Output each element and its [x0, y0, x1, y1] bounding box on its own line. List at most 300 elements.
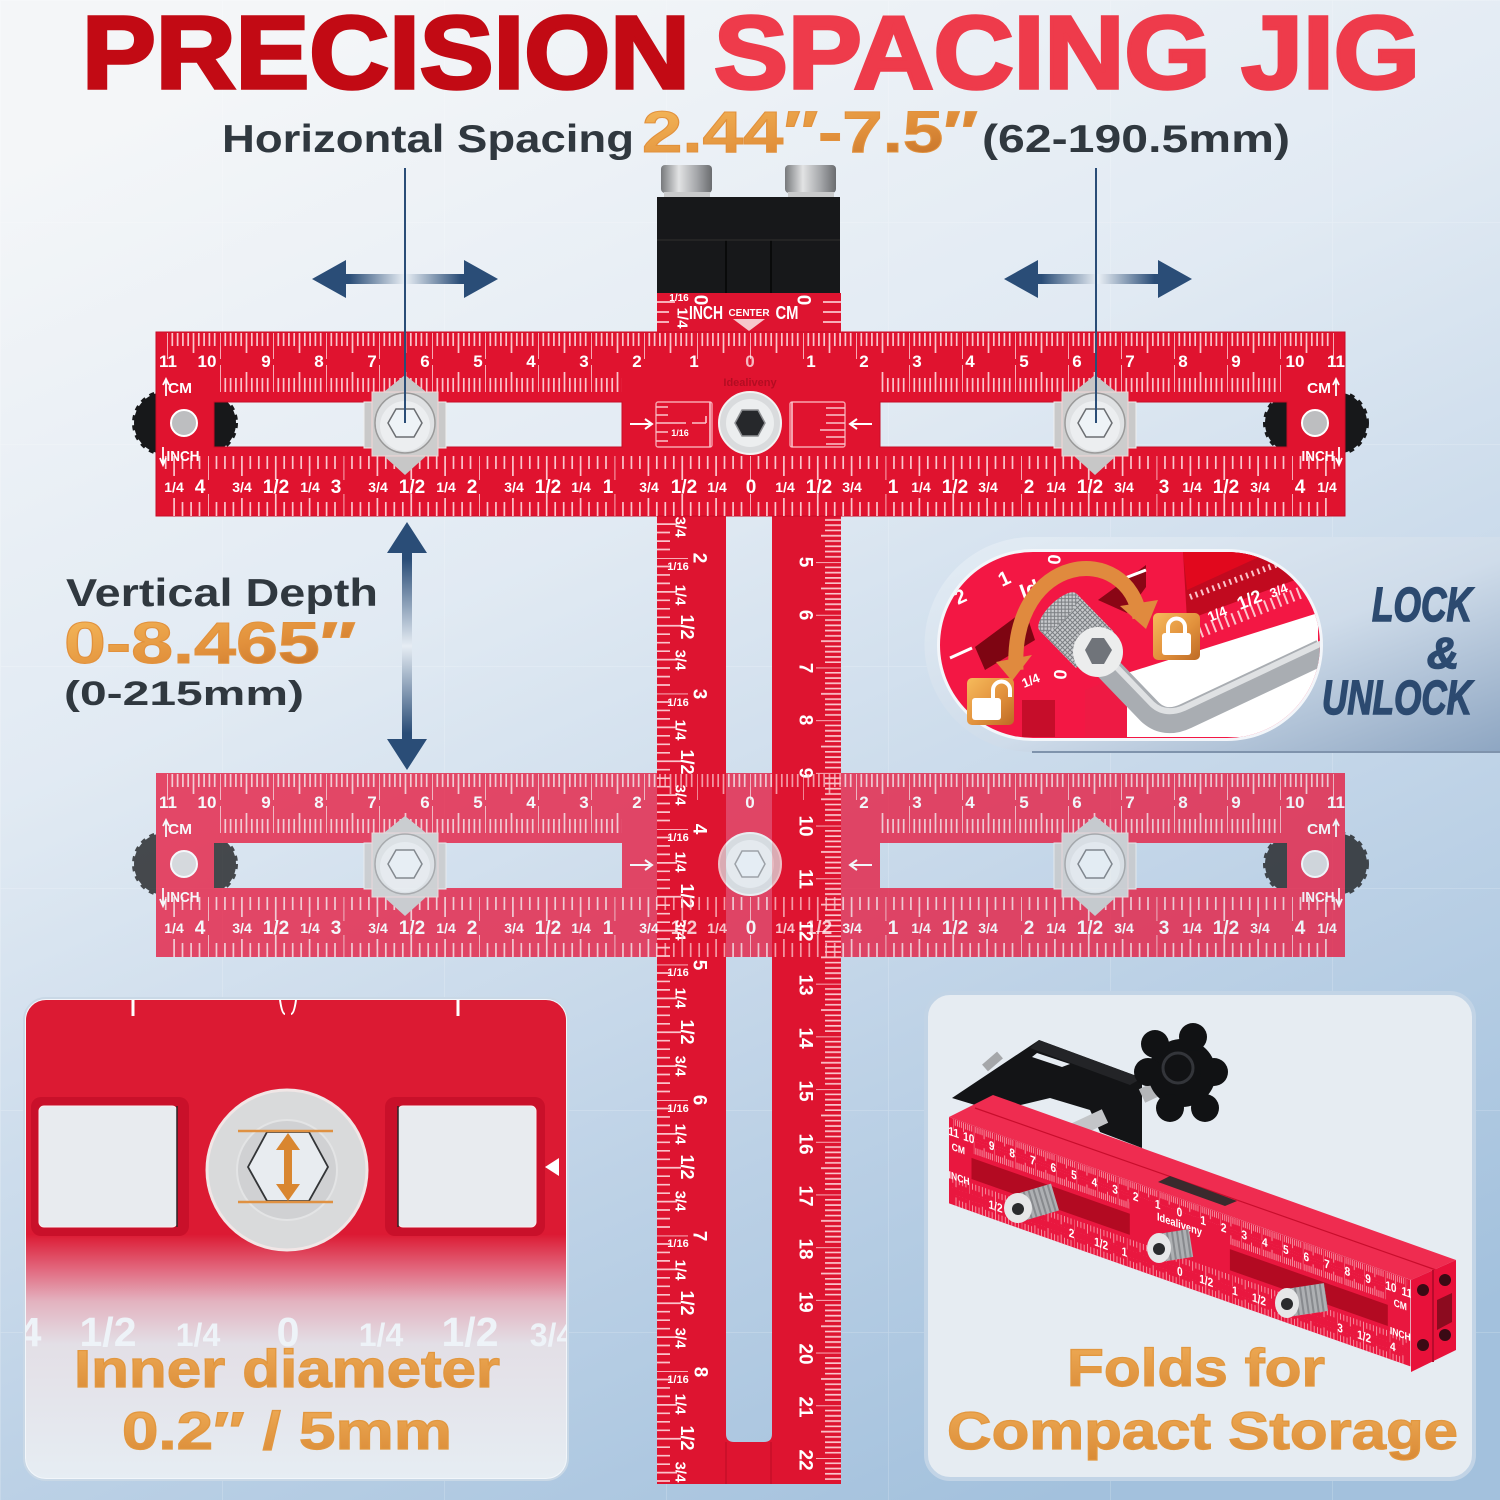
jig front face: 1/2	[1252, 1291, 1266, 1309]
top labels of the vertical ruler: CENTER	[728, 308, 770, 319]
lock and unlock label: &	[1427, 629, 1459, 678]
ruler 2 end labels: INCH	[1302, 889, 1334, 906]
ruler 2 inch numbers: 1/2	[1213, 918, 1239, 939]
panel: inner diameter: 4	[19, 1309, 42, 1355]
inch labels: 6	[688, 1095, 710, 1105]
inch labels: 3	[688, 689, 710, 699]
ruler 2 inch numbers: 3/4	[1250, 920, 1270, 936]
ruler 1 centre gauge windows: 1/16	[671, 428, 689, 438]
black clamp block	[657, 197, 840, 296]
heading: horizontal spacing	[222, 100, 1290, 165]
inch labels: 3/4	[672, 517, 688, 538]
ruler 2 inch numbers: 1/4	[1046, 920, 1066, 936]
jig front face: 3	[1016, 1208, 1022, 1223]
inch labels: 4	[688, 824, 710, 835]
ruler 1 inch numbers: 1/4	[911, 479, 931, 495]
ruler 2 end labels	[160, 820, 1342, 906]
horizontal arrow left	[312, 260, 498, 298]
inner diameter text: 0.2″ / 5mm	[122, 1402, 452, 1461]
inch labels: 1/2	[677, 1019, 697, 1045]
inch labels: 1/16	[667, 1103, 689, 1115]
ruler 1 cm numbers: 10	[198, 352, 216, 371]
ruler 2 end labels: CM	[1307, 821, 1331, 838]
ruler 1 inch numbers: 0	[746, 477, 756, 498]
jig front face: 6	[1304, 1250, 1309, 1265]
ruler 1 inch numbers: 1/2	[1213, 477, 1239, 498]
jig front face: 4	[1092, 1176, 1098, 1191]
centimetre labels: 19	[794, 1291, 816, 1313]
ruler 2 centre gauge arrows	[630, 860, 872, 870]
inch labels: 1/4	[672, 988, 688, 1009]
ruler 1 inch numbers: 3/4	[639, 479, 659, 495]
ruler 1 inch numbers: 3/4	[842, 479, 862, 495]
inset photo: wrench in bolt: 0	[1044, 554, 1065, 565]
ruler 2 inch numbers: 1/2	[942, 918, 968, 939]
threaded bolts on jig	[1004, 1193, 1326, 1318]
inch labels: 1/4	[672, 1124, 688, 1145]
jig front face: CM	[1394, 1297, 1407, 1314]
panel: inner diameter: 1/2	[442, 1309, 498, 1355]
centimetre labels: 13	[794, 974, 816, 996]
ruler 2 cm numbers: 6	[420, 793, 430, 812]
jig front face: INCH	[949, 1169, 970, 1189]
ruler 2 inch numbers: 1/4	[436, 920, 456, 936]
inch labels: 1/16	[667, 697, 689, 709]
ruler 2 inch numbers: 2	[1024, 918, 1034, 939]
ruler 2 inch numbers: 1/4	[1182, 920, 1202, 936]
ruler 1 inch numbers: 1/2	[1077, 477, 1103, 498]
ruler 1 inch numbers: 1/4	[775, 479, 795, 495]
jig front face: 7	[1030, 1154, 1036, 1169]
inch labels: 1/2	[677, 749, 697, 775]
ruler 2 inch numbers: 1	[603, 918, 614, 939]
ruler 1 inch numbers: 1/2	[942, 477, 968, 498]
vertical ruler: left and right bars	[657, 293, 841, 1484]
ruler 2 inch numbers: 3/4	[368, 920, 388, 936]
title	[82, 0, 1420, 110]
ruler 1 end labels: INCH	[166, 448, 200, 465]
ruler 2 cm numbers	[159, 793, 1345, 812]
centimetre labels: 16	[794, 1133, 816, 1155]
ruler 1 cm numbers: 6	[1072, 352, 1082, 371]
ruler 1 cm numbers: 1	[689, 352, 699, 371]
ruler 1 centre gauge windows	[630, 377, 872, 447]
jig front face: 4	[1262, 1236, 1268, 1251]
top labels of the vertical ruler: 1/16	[669, 293, 689, 304]
ruler 2 inch numbers: 1/2	[1077, 918, 1103, 939]
icon: unlocked padlock	[967, 678, 1014, 725]
ruler 2 inch numbers: 1	[888, 918, 899, 939]
ruler 1 inch numbers: 1/4	[300, 479, 320, 495]
jig front face: 5	[1071, 1168, 1077, 1183]
ruler 2 inch numbers: 1/2	[535, 918, 561, 939]
ruler 1 inch numbers: 3/4	[504, 479, 524, 495]
centimetre labels: 17	[794, 1185, 816, 1207]
jig front face: CM	[952, 1141, 965, 1158]
top labels of the vertical ruler: 0	[792, 295, 814, 305]
inch labels: 1/16	[667, 561, 689, 573]
centimetre labels: 6	[794, 610, 816, 620]
inch labels: 1/4	[672, 852, 688, 873]
heading: horizontal spacing: Horizontal Spacing	[222, 118, 634, 161]
ruler 1 sliders and bolt	[364, 375, 1136, 475]
ruler 2 inch numbers: 1/4	[300, 920, 320, 936]
jig front face: 11	[948, 1125, 960, 1142]
ruler 1 cm numbers	[159, 352, 1345, 371]
jig top face	[949, 1095, 1456, 1280]
ruler 1 cm numbers: 4	[965, 352, 975, 371]
ruler 2 inch numbers: 4	[1295, 918, 1306, 939]
jig front face: 1/2	[1357, 1329, 1371, 1346]
vertical double arrow	[387, 522, 427, 770]
inch labels: 3/4	[672, 1056, 688, 1077]
inset photo: wrench in bolt: 2	[951, 585, 970, 610]
inner diameter text: Inner diameter	[74, 1340, 500, 1399]
ruler 1 inch numbers: 4	[1295, 477, 1306, 498]
centimetre labels: 14	[794, 1027, 816, 1049]
icon: large bolt	[207, 1090, 367, 1250]
jig end face	[1411, 1260, 1456, 1372]
inch labels: 1/16	[667, 1374, 689, 1386]
ruler 1 inch numbers: 1/2	[671, 477, 697, 498]
ruler 1 cm numbers: 7	[1125, 352, 1135, 371]
jig front face: 3	[1112, 1183, 1118, 1198]
inch labels: 2	[688, 553, 710, 563]
jig front face: 2	[1221, 1221, 1227, 1236]
heading: vertical depth	[64, 572, 378, 713]
ruler 1 cm numbers: 9	[1231, 352, 1241, 371]
ruler 1 cm numbers: 1	[806, 352, 816, 371]
knobs behind ruler 2	[134, 833, 1367, 895]
panel: folds for compact storage	[926, 993, 1474, 1479]
folded jig illustration	[948, 1023, 1456, 1372]
ruler 2 cm numbers: 11	[1327, 793, 1345, 812]
ruler 2 cm numbers: 9	[1231, 793, 1241, 812]
centimetre labels: 22	[794, 1449, 816, 1471]
inset photo: wrench in bolt: 0	[1050, 669, 1071, 680]
ruler 1 cm numbers: 9	[261, 352, 271, 371]
inch labels: 1/2	[677, 1154, 697, 1180]
inset photo: wrench in bolt	[940, 552, 1322, 738]
ruler 2 inch numbers: 3	[331, 918, 341, 939]
top labels of the vertical ruler: 0	[690, 295, 710, 305]
icon: locked padlock	[1153, 613, 1200, 660]
jig front face: 7	[1324, 1258, 1330, 1272]
top labels of the vertical ruler: 1/4	[674, 308, 690, 329]
ruler 1 ticks	[164, 333, 1337, 516]
jig front face: 10	[963, 1130, 974, 1147]
horizontal ruler 2, translucent	[134, 773, 1367, 957]
jig front face: 8	[1009, 1147, 1016, 1162]
inch labels: 1/16	[667, 1238, 689, 1250]
centimetre labels: 5	[794, 557, 816, 568]
pointer line right	[1095, 168, 1097, 423]
inch labels: 1/16	[667, 967, 689, 979]
jig front face: 6	[1051, 1161, 1056, 1176]
ruler 1 inch numbers: 1/2	[806, 477, 832, 498]
ruler 1 inch numbers: 2	[1024, 477, 1034, 498]
ruler 2 cm numbers: 2	[632, 793, 642, 812]
panel: inner diameter: 1/2	[80, 1309, 136, 1355]
centimetre labels: 21	[794, 1396, 816, 1418]
jig front face: 2	[1133, 1190, 1138, 1205]
ruler 2 inch numbers: 1/4	[911, 920, 931, 936]
ruler 1 end labels: INCH	[1302, 448, 1334, 465]
inch labels: 8	[690, 1367, 710, 1377]
inset photo: wrench in bolt: 1/2	[1234, 586, 1265, 614]
inch labels: 1/4	[672, 1260, 688, 1281]
ruler 2 inch numbers: 1/4	[571, 920, 591, 936]
star knob	[1134, 1023, 1228, 1122]
ruler 2 inch numbers: 3/4	[1114, 920, 1134, 936]
panel: lock and unlock	[925, 537, 1500, 752]
centimetre labels	[794, 557, 816, 1471]
ruler 2 inch numbers: 4	[195, 918, 206, 939]
jig front face: 1	[1232, 1284, 1238, 1299]
inch labels: 1/4	[672, 1394, 688, 1415]
inch labels	[667, 517, 710, 1483]
inch labels: 1/4	[672, 585, 688, 606]
panel: inner diameter	[19, 998, 574, 1480]
folds text	[947, 1339, 1458, 1461]
ruler 1 cm numbers: 4	[526, 352, 536, 371]
inset photo: wrench in bolt: Id	[1016, 575, 1043, 605]
jig front face: 1	[1155, 1198, 1161, 1213]
ruler 2 inch numbers: 3/4	[639, 920, 659, 936]
heading: vertical depth: (0-215mm)	[64, 675, 304, 713]
inch labels: 3/4	[672, 1191, 688, 1212]
jig front face: 9	[1365, 1272, 1371, 1287]
jig front face: 10	[1385, 1279, 1397, 1296]
jig front face: 3	[1337, 1322, 1343, 1336]
jig front face: 1/2	[1094, 1236, 1108, 1253]
ruler 1 inch numbers: 1	[603, 477, 614, 498]
ruler 1 inch numbers: 3/4	[368, 479, 388, 495]
jig front face: 0	[1177, 1265, 1183, 1280]
ruler 1 inch numbers: 1/2	[399, 477, 425, 498]
ruler 2 cm numbers: 3	[912, 793, 922, 812]
ruler 2 cm numbers: 4	[965, 793, 975, 812]
ruler 2 inch numbers: 0	[746, 918, 756, 939]
inch labels: 3/4	[672, 1462, 688, 1483]
heading: vertical depth: Vertical Depth	[66, 572, 378, 615]
ruler 2 body, leaving the vertical bars visible	[156, 773, 1345, 957]
ruler 2 inch numbers: 1/4	[707, 920, 727, 936]
inset photo: wrench in bolt: 1/4	[1020, 670, 1043, 691]
jig front face: 9	[989, 1139, 994, 1154]
inch labels: 1/16	[667, 832, 689, 844]
ruler 1 cm numbers: 8	[1178, 352, 1188, 371]
ruler 2 cm numbers: 4	[526, 793, 536, 812]
heading: vertical depth: 0-8.465″	[64, 611, 356, 676]
jig front face: 3	[1241, 1229, 1247, 1243]
jig front face: 4	[1390, 1340, 1396, 1355]
ruler 1 inch numbers: 1/4	[164, 479, 184, 495]
heading: horizontal spacing: (62-190.5mm)	[982, 118, 1290, 161]
ruler 1 inch numbers: 3	[1159, 477, 1169, 498]
ruler 1 body	[156, 332, 1345, 516]
inch labels: 3/4	[672, 785, 688, 806]
ruler 1 cm numbers: 3	[579, 352, 589, 371]
panel: inner diameter: 1/4	[359, 1317, 403, 1353]
inch labels: 1/4	[672, 720, 688, 741]
ruler 1 inch numbers: 1/2	[263, 477, 289, 498]
folds text: Compact Storage	[947, 1402, 1458, 1461]
ruler 1 cm numbers: 6	[420, 352, 430, 371]
jig front face: 8	[1345, 1265, 1351, 1280]
pointer line left	[404, 168, 406, 423]
ruler 1 cm numbers: 11	[159, 352, 177, 371]
jig front face: 1	[1122, 1245, 1128, 1260]
jig front face: 0	[1177, 1206, 1182, 1220]
centimetre labels: 9	[794, 768, 816, 778]
ruler 2 inch numbers: 1/4	[775, 920, 795, 936]
ruler 1 cm numbers: 2	[632, 352, 642, 371]
jig front face: INCH	[1390, 1325, 1411, 1344]
inch labels: 3/4	[672, 650, 688, 671]
ruler 1 cm numbers: 11	[1327, 352, 1345, 371]
ruler 2 inch numbers: 3	[1159, 918, 1169, 939]
ruler 1 cm numbers: 2	[859, 352, 869, 371]
jig front face	[948, 1117, 1413, 1367]
ruler 1 inch numbers: 1/4	[571, 479, 591, 495]
ruler 2 inch numbers: 3/4	[842, 920, 862, 936]
ruler 1 end labels: CM	[168, 380, 192, 397]
ruler 1 inch numbers	[164, 477, 1337, 498]
inset photo: wrench in bolt: 3/4	[1268, 580, 1291, 601]
ruler 2 inch numbers: 2	[467, 918, 477, 939]
top labels of the vertical ruler	[657, 293, 841, 331]
heading: horizontal spacing: 2.44″-7.5″	[642, 100, 978, 165]
ruler 2 cm numbers: 7	[367, 793, 377, 812]
inset photo: wrench in bolt: 1/4	[1205, 603, 1229, 625]
ruler 2 cm numbers: 7	[1125, 793, 1135, 812]
knobs behind ruler 1	[134, 392, 1367, 454]
ruler 1 cm numbers: 5	[473, 352, 483, 371]
panel: inner diameter: 1/4	[176, 1317, 220, 1353]
centimetre labels: 7	[794, 663, 816, 673]
inch labels: 3/4	[672, 1328, 688, 1349]
ruler 1 inch numbers: 3/4	[232, 479, 252, 495]
ruler 2 inch numbers: 1/2	[399, 918, 425, 939]
folds text: Folds for	[1067, 1339, 1325, 1398]
ruler 1 cm numbers: 7	[367, 352, 377, 371]
ruler 1 inch numbers: 3	[331, 477, 341, 498]
inch labels: 1/2	[677, 614, 697, 640]
ruler 2 cm numbers: 2	[859, 793, 869, 812]
lock and unlock label	[1322, 579, 1474, 725]
top labels of the vertical ruler: CM	[776, 303, 798, 323]
jig front face: 2	[1285, 1303, 1291, 1318]
jig front face: 1	[1200, 1214, 1206, 1229]
top labels of the vertical ruler: INCH	[689, 303, 723, 323]
jig front face: 2	[1069, 1227, 1074, 1242]
ruler 1 inch numbers: 1/2	[535, 477, 561, 498]
ruler 2 inch numbers: 3/4	[978, 920, 998, 936]
black bracket and knob	[952, 1023, 1228, 1148]
inch labels: 5	[688, 960, 710, 971]
ruler 1 inch numbers: 1/4	[436, 479, 456, 495]
centimetre labels: 20	[794, 1343, 816, 1365]
centimetre labels: 15	[794, 1080, 816, 1102]
inset photo: wrench in bolt: 1	[995, 567, 1014, 592]
ruler 2 cm numbers: 5	[1019, 793, 1029, 812]
jig front face: Idealiveny	[1157, 1210, 1202, 1239]
ruler 1 cm numbers: 5	[1019, 352, 1029, 371]
centimetre labels: 12	[794, 920, 816, 942]
centimetre labels: 18	[794, 1238, 816, 1260]
ruler 1 inch numbers: 3/4	[1250, 479, 1270, 495]
ruler 2 cm numbers: 11	[159, 793, 177, 812]
ruler 1 inch numbers: 1/4	[1046, 479, 1066, 495]
ruler 2 inch numbers: 1/2	[671, 918, 697, 939]
ruler 1 end labels: CM	[1307, 380, 1331, 397]
inch labels: 7	[688, 1231, 710, 1241]
ruler 2 cm numbers: 8	[314, 793, 324, 812]
ruler 2 inch numbers: 3/4	[504, 920, 524, 936]
jig front face: 11	[1402, 1285, 1413, 1302]
ruler 1 inch numbers: 1	[888, 477, 899, 498]
ruler 2 cm numbers: 10	[1286, 793, 1304, 812]
ruler 2 cm numbers: 8	[1178, 793, 1188, 812]
horizontal ruler 1	[134, 332, 1367, 516]
ruler 1 cm numbers: 8	[314, 352, 324, 371]
arrow: rotate direction	[996, 569, 1158, 681]
panel: inner diameter: 3/4	[530, 1317, 574, 1353]
ruler 1 cm numbers: 3	[912, 352, 922, 371]
ruler 1 cm numbers: 10	[1286, 352, 1304, 371]
ruler 1 inch numbers: 2	[467, 477, 477, 498]
ruler 2 inch numbers	[164, 918, 1337, 939]
ruler 2 cm numbers: 9	[261, 793, 271, 812]
ruler 1 inch numbers: 1/4	[1182, 479, 1202, 495]
jig front face: 1/2	[1199, 1273, 1213, 1291]
ruler 2 cm numbers: 0	[745, 793, 755, 812]
ruler 1 inch numbers: 3/4	[978, 479, 998, 495]
ruler 2 ticks	[164, 774, 1337, 957]
panel: inner diameter: 0	[277, 1309, 299, 1355]
inch labels: 1/2	[677, 1425, 697, 1451]
inner diameter text	[74, 1340, 500, 1461]
ruler 1 centre gauge windows: Idealiveny	[723, 377, 777, 389]
ruler 2 inch numbers: 1/2	[806, 918, 832, 939]
ruler 2 cm numbers: 5	[473, 793, 483, 812]
ruler 1 cm numbers: 0	[745, 352, 755, 371]
ruler 1 end labels	[160, 379, 1342, 465]
ruler 1 inch numbers: 1/4	[707, 479, 727, 495]
ruler 1 inch numbers: 3/4	[1114, 479, 1134, 495]
ruler 2 inch numbers: 1/4	[164, 920, 184, 936]
inch labels: 1/2	[677, 1290, 697, 1316]
ruler 1 inch numbers: 4	[195, 477, 206, 498]
ruler 2 end labels: CM	[168, 821, 192, 838]
ruler 2 inch numbers: 3/4	[232, 920, 252, 936]
ruler 2 cm numbers: 10	[198, 793, 216, 812]
knurled knobs on top block	[661, 165, 836, 198]
jig front face: 1/2	[989, 1198, 1003, 1216]
ruler 2 inch numbers: 1/2	[263, 918, 289, 939]
ruler 2 end labels: INCH	[166, 889, 200, 906]
centimetre labels: 11	[794, 869, 816, 889]
jig front face: 5	[1283, 1243, 1289, 1258]
inch labels: 3/4	[672, 920, 688, 941]
ruler 2 cm numbers: 6	[1072, 793, 1082, 812]
ruler 1 inch numbers: 1/4	[1317, 479, 1337, 495]
centimetre labels: 10	[794, 815, 816, 837]
inch labels: 1/2	[677, 883, 697, 909]
horizontal arrow right	[1004, 260, 1192, 298]
ruler 2 cm numbers: 3	[579, 793, 589, 812]
